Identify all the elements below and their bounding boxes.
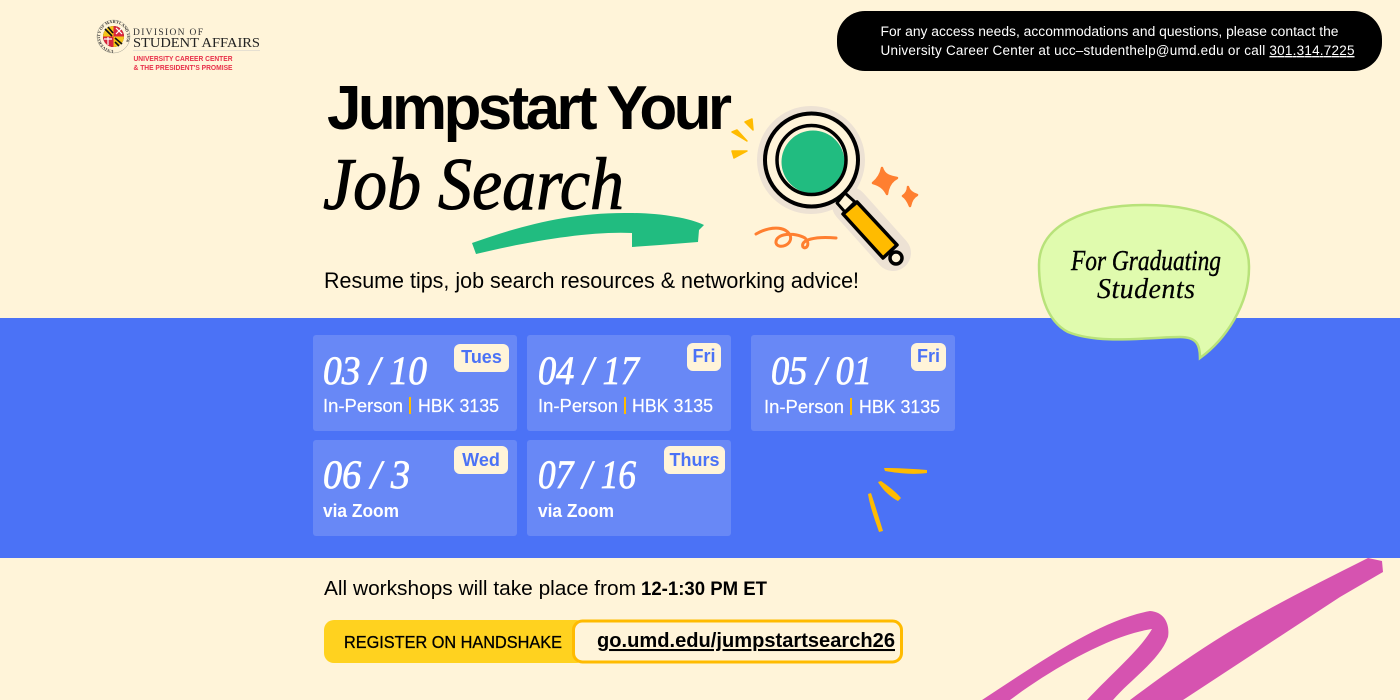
speech bubble: for graduating students: Students — [1097, 274, 1195, 305]
access contact pill: For any access needs, accommodations and questions, please contact the — [880, 24, 1338, 39]
pink brush strokes — [982, 558, 1383, 700]
register button: REGISTER ON HANDSHAKE — [344, 632, 562, 652]
card: 04/17: 04 / 17 — [538, 348, 641, 393]
card: 05/01 — [751, 335, 955, 431]
schedule note: 12-1:30 PM ET — [641, 579, 767, 600]
access contact pill: University Career Center at ucc–studenthelp@umd.edu or call 301.314.7225 — [880, 43, 1354, 58]
green brush underline — [472, 213, 704, 254]
blue band — [0, 318, 1400, 558]
logo text: UNIVERSITY CAREER CENTER — [134, 56, 232, 63]
card: 06/3: 06 / 3 — [323, 452, 410, 497]
card: 03/10: In-Person — [323, 395, 403, 416]
card: 03/10: HBK 3135 — [418, 395, 499, 416]
card: 05/01: HBK 3135 — [859, 396, 940, 417]
card: 04/17: HBK 3135 — [632, 395, 713, 416]
logo: Division of Student Affairs — [96, 20, 260, 72]
card: 06/3: Wed — [462, 450, 500, 470]
title: Job Search — [323, 144, 624, 226]
subtitle: Resume tips, job search resources & networking advice! — [324, 268, 859, 293]
logo text — [133, 28, 260, 72]
icon: yellow spark lines — [732, 119, 753, 158]
neck — [837, 193, 855, 212]
card: 06/3 — [313, 440, 517, 536]
icon: orange sparkles — [873, 168, 917, 206]
title: Jumpstart Your — [327, 74, 732, 143]
halo — [757, 106, 893, 253]
title — [323, 74, 732, 226]
card: 07/16: 07 / 16 — [538, 452, 636, 497]
register button — [324, 620, 902, 663]
card: 05/01: Fri — [917, 346, 940, 366]
card: 04/17 — [527, 335, 731, 431]
card: 04/17: In-Person — [538, 395, 618, 416]
speech bubble: for graduating students: For Graduating — [1070, 245, 1221, 277]
register button: go.umd.edu/jumpstartsearch26 — [597, 629, 895, 652]
schedule note: All workshops will take place from — [324, 578, 636, 600]
card: 07/16: via Zoom — [538, 500, 614, 521]
card: 07/16 — [527, 440, 731, 536]
icon: orange squiggle — [756, 228, 836, 248]
card: 03/10: 03 / 10 — [323, 348, 427, 393]
icon: university seal: UNIVERSITY OF MARYLAND 1856 — [97, 20, 130, 53]
card: 04/17: Fri — [692, 346, 716, 366]
speech bubble: for graduating students — [1039, 205, 1249, 358]
card: 03/10 — [313, 335, 517, 431]
card: 03/10: Tues — [461, 347, 502, 367]
schedule note — [324, 578, 767, 600]
card: 06/3: via Zoom — [323, 500, 399, 521]
logo text: STUDENT AFFAIRS — [133, 36, 260, 51]
logo text: & THE PRESIDENT'S PROMISE — [134, 65, 233, 72]
access contact pill — [837, 11, 1382, 71]
card: 07/16: Thurs — [669, 450, 720, 470]
icon: magnifying glass — [757, 106, 902, 264]
card: 05/01: In-Person — [764, 396, 844, 417]
logo text: DIVISION OF — [133, 28, 203, 38]
card: 05/01: 05 / 01 — [771, 348, 872, 393]
icon: yellow spark lines on blue — [868, 468, 927, 532]
